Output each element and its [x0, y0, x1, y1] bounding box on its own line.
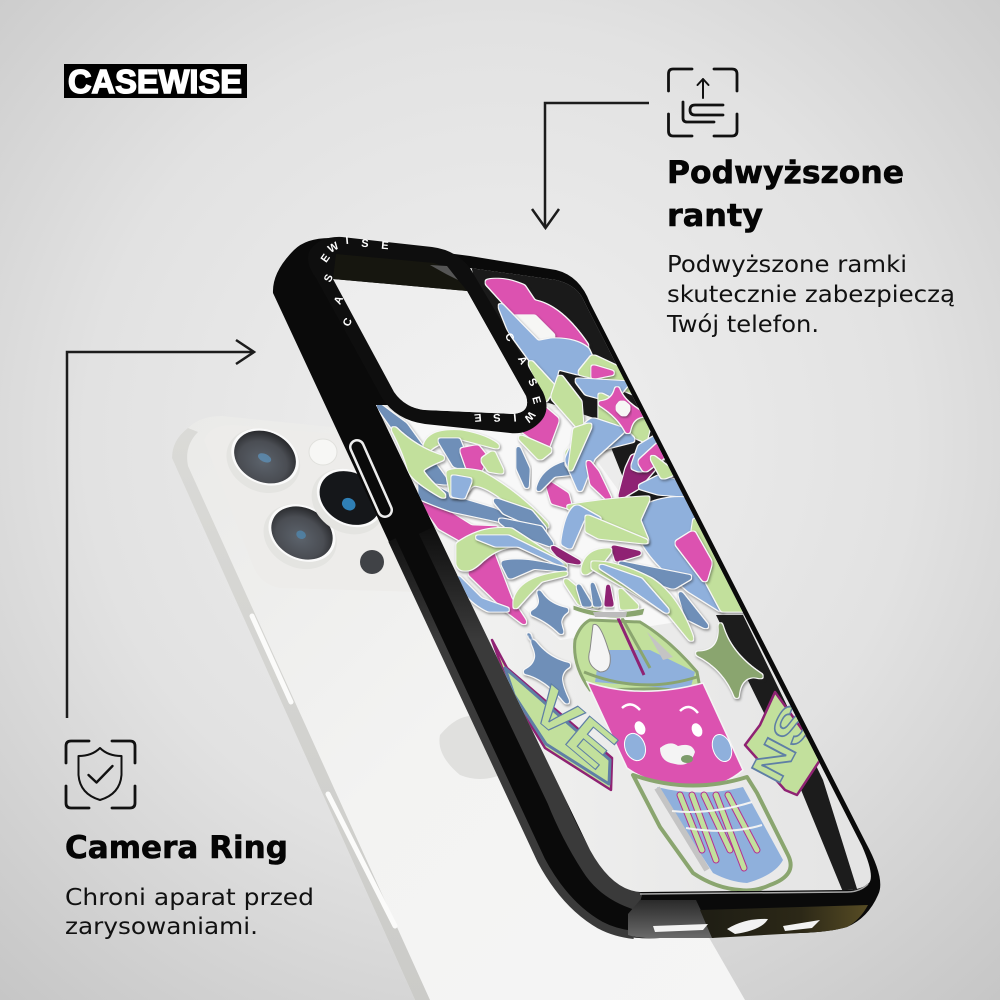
- text block: camera ring description: [65, 885, 314, 940]
- artwork: jar: [573, 605, 700, 690]
- ring lettering: A: [332, 294, 346, 307]
- lens: top: [216, 416, 311, 505]
- ring lettering: E: [474, 411, 482, 423]
- heading: Podwyższone ranty: Podwyższone: [667, 155, 904, 191]
- bottom ports: [653, 919, 820, 934]
- text block: raised edges description: skutecznie zabezpieczą: [667, 282, 955, 308]
- lens: lower: [252, 492, 348, 581]
- camera opening: [333, 279, 527, 414]
- text block: raised edges description: [666, 252, 955, 338]
- ring lettering: E: [319, 252, 333, 265]
- case: bumper and clear back: [273, 238, 890, 938]
- camera ring: [308, 235, 547, 433]
- text block: raised edges description: Twój telefon.: [666, 312, 819, 338]
- arrow: camera ring callout: [67, 340, 254, 718]
- ring lettering: E: [381, 240, 389, 252]
- icon: shield with check: [66, 741, 135, 808]
- ring lettering: I: [345, 235, 349, 247]
- artwork: lettering sticker right: NS: [741, 696, 824, 791]
- bumper: inner translucent band: [427, 530, 640, 902]
- text block: camera ring description: Chroni aparat przed: [65, 885, 314, 911]
- ring lettering: W: [326, 240, 342, 256]
- arrow: top callout to raised edge: [532, 103, 649, 228]
- artwork: lower bottle with green strands: [633, 775, 791, 890]
- heading: Podwyższone ranty: ranty: [667, 198, 763, 234]
- ring lettering: [319, 235, 543, 425]
- logo: CASEWISE: CASEWISE: [68, 63, 242, 100]
- sensor: [360, 550, 384, 574]
- camera opening bevel: [333, 254, 467, 291]
- phone: white iPhone behind the case: [172, 416, 745, 1000]
- heading: Camera Ring: Camera Ring: [65, 830, 288, 866]
- artwork: small stars: [532, 590, 567, 633]
- text block: camera ring description: zarysowaniami.: [65, 914, 258, 940]
- inner rim highlight: [640, 884, 868, 894]
- side buttons: [252, 616, 395, 926]
- inner black wall top: [470, 262, 700, 520]
- lens: right: [300, 456, 396, 547]
- ring lettering: S: [525, 376, 539, 389]
- bumper: outer translucent rim: [392, 540, 634, 935]
- ring lettering: C: [341, 316, 355, 329]
- camera plateau: [204, 425, 420, 592]
- ring lettering: I: [513, 411, 517, 423]
- artwork: lettering sticker left: VE: [519, 675, 628, 780]
- ring lettering: E: [529, 395, 543, 405]
- bumper: bottom left translucent section: [628, 900, 714, 938]
- logo mark on phone: [439, 716, 510, 779]
- ring lettering: A: [515, 354, 529, 367]
- ring lettering: C: [502, 331, 516, 344]
- ring lettering: S: [322, 273, 336, 284]
- bumper: bottom right tinted section: [700, 905, 868, 938]
- ring lettering: S: [493, 411, 501, 423]
- artwork: leaves and flowers: [378, 280, 762, 703]
- clear back with artwork: [370, 262, 890, 902]
- icon: raised edges: [668, 69, 737, 136]
- ring lettering: W: [521, 409, 537, 425]
- side button on case: [357, 447, 385, 510]
- white field behind leaves: [469, 410, 680, 640]
- flash: [309, 439, 337, 465]
- heading: Podwyższone ranty: [667, 155, 904, 234]
- ring lettering: S: [361, 238, 369, 250]
- artwork: pink label with face: [587, 682, 743, 787]
- text block: raised edges description: Podwyższone ramki: [667, 252, 907, 278]
- artwork: lettering sticker left: [492, 640, 628, 790]
- inner black wall right: [716, 615, 858, 892]
